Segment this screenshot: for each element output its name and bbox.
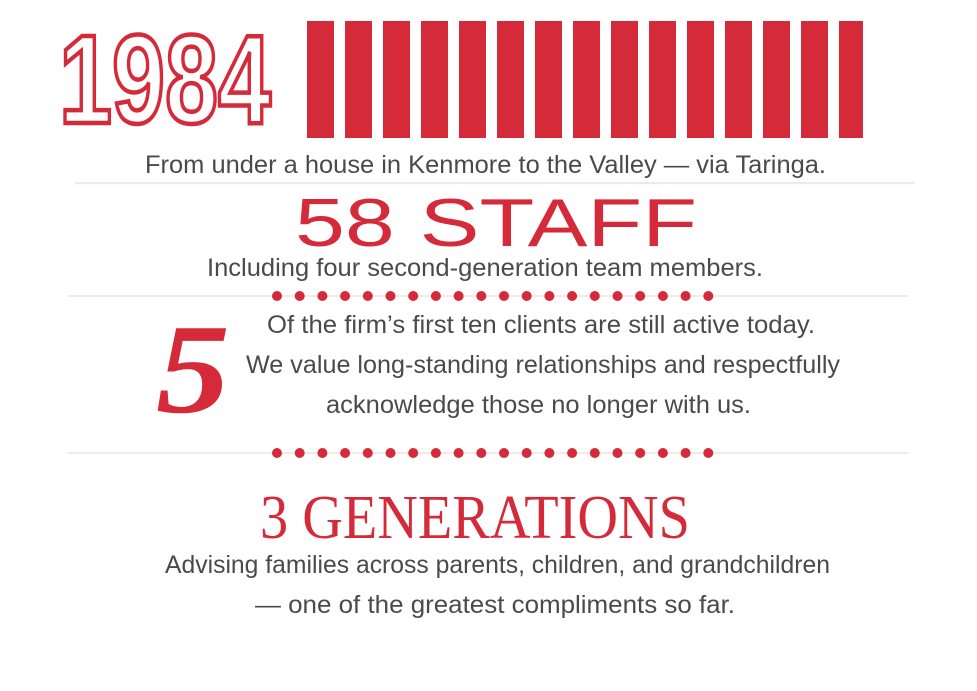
text: clients: acknowledge those no longer with us. <box>326 391 751 419</box>
big number 5: 5 <box>156 298 230 440</box>
text: clients: Of the firm’s first ten clients are still active today. <box>267 311 815 339</box>
dotted divider 2 <box>272 448 713 458</box>
heading: 3 generations: 3 GENERATIONS <box>260 484 690 552</box>
bars graphic <box>307 21 863 138</box>
dotted divider 1 <box>272 291 713 301</box>
text: generations detail: Advising families across parents, children, and grandchildren <box>165 551 830 579</box>
text: generations detail <box>165 551 830 619</box>
year 1984 outline: 1984 <box>59 9 271 150</box>
text: staff detail: Including four second-generation team members. <box>207 254 763 282</box>
text: origin: From under a house in Kenmore to the Valley — via Taringa. <box>145 151 826 179</box>
heading: 58 staff: 58 STAFF <box>295 185 697 261</box>
text: clients <box>246 311 840 419</box>
text: clients: We value long-standing relationships and respectfully <box>246 351 840 379</box>
text: generations detail: — one of the greatest compliments so far. <box>255 591 735 619</box>
